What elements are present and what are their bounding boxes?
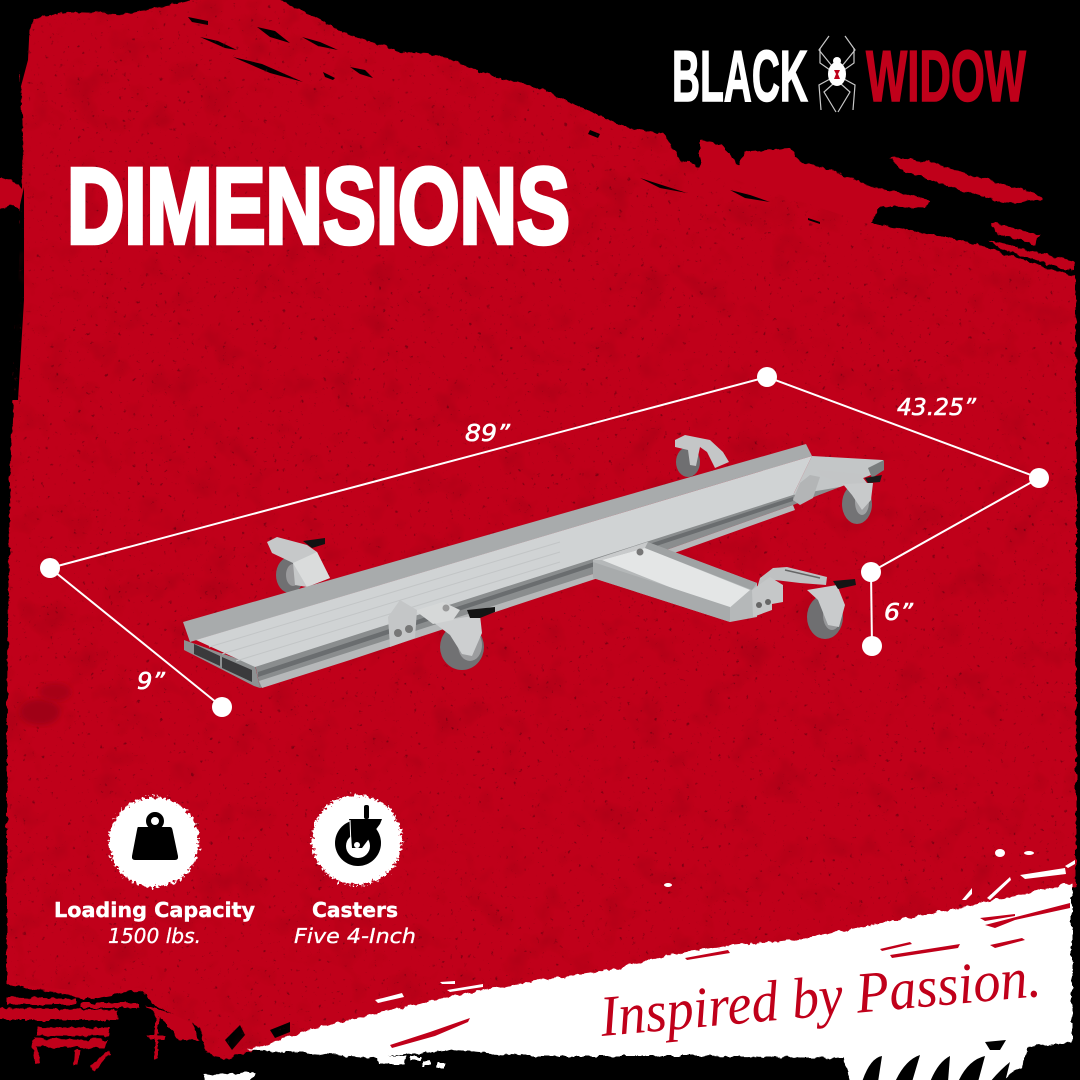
product: motorcycle dolly <box>183 435 884 688</box>
deck ridges <box>209 542 560 661</box>
dimension label: 43.25: 43.25” <box>897 395 977 421</box>
icon: caster wheel <box>312 795 402 885</box>
front end face <box>184 640 260 688</box>
rear left caster <box>267 537 330 593</box>
logo: Black Widow <box>672 36 1026 117</box>
dimension lines <box>50 377 1039 707</box>
left streak <box>0 177 30 210</box>
dimension label: 89: 89” <box>465 421 511 447</box>
title: DIMENSIONS <box>67 145 570 266</box>
dimension label: 9: 9” <box>137 669 166 695</box>
value: 1500 lbs: 1500 lbs. <box>108 924 201 948</box>
logo word: BLACK: BLACK <box>672 37 808 117</box>
white flecks in red <box>375 849 1075 1003</box>
deck <box>196 456 812 667</box>
feature: casters <box>294 795 416 948</box>
label: casters: Casters <box>312 898 398 922</box>
red scratches in white <box>390 903 1070 1048</box>
bottom left streaks <box>7 997 77 1004</box>
upper right streaks merged into the edge <box>700 140 930 225</box>
value: five 4-inch: Five 4-Inch <box>294 924 416 948</box>
rail side channel <box>255 487 840 688</box>
front left caster <box>388 600 495 670</box>
rear right caster <box>675 435 729 477</box>
front right caster <box>752 567 856 639</box>
panel: white brush stroke <box>203 849 1075 1080</box>
black teeth in the white drips <box>862 1040 1010 1080</box>
far right caster <box>793 470 882 524</box>
dimension markers <box>40 367 1049 717</box>
dimension label: 6: 6” <box>884 600 914 626</box>
rear wall of rail <box>183 444 812 642</box>
icon: spider <box>819 36 855 112</box>
black scratches in red <box>12 17 820 1050</box>
icon: weight <box>109 797 199 887</box>
rear right tip plate <box>793 456 884 495</box>
feature: loading capacity <box>54 797 255 948</box>
label: loading capacity: Loading Capacity <box>54 898 255 922</box>
center arm tray <box>593 542 757 622</box>
slogan: Inspired by Passion. <box>596 944 1043 1049</box>
